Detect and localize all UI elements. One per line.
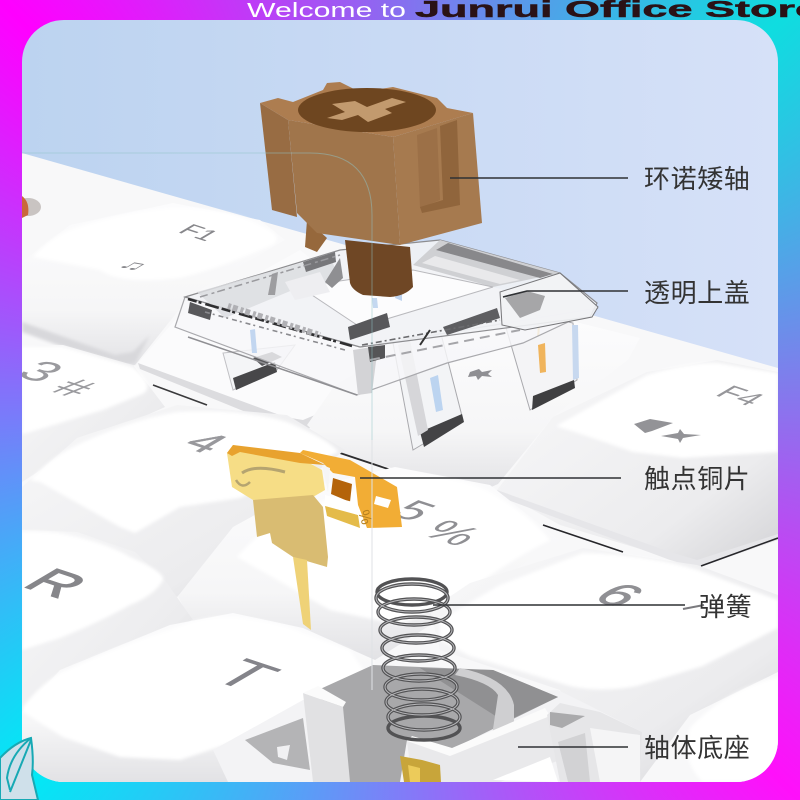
housing sparkle lines <box>188 255 520 360</box>
label: 透明上盖: 透明上盖 <box>644 278 750 308</box>
housing blue reflections <box>395 294 402 301</box>
keyboard <box>7 153 778 782</box>
key: T <box>22 613 375 782</box>
stem recess <box>298 88 436 132</box>
label: 弹簧: 弹簧 <box>699 592 752 622</box>
key: R <box>22 531 192 702</box>
spring <box>376 579 460 740</box>
key: 3# <box>22 345 165 482</box>
base outer body <box>216 700 313 782</box>
key: bottom right <box>736 687 778 782</box>
clear top housing <box>175 240 598 450</box>
label: 轴体底座: 轴体底座 <box>644 733 750 763</box>
key: F2 <box>138 363 314 428</box>
key: F1: ♫ <box>113 256 153 275</box>
key: R: R <box>11 561 102 605</box>
contact tan lower part <box>253 495 328 567</box>
leader lines <box>360 178 685 747</box>
key: F1: F1 <box>172 221 225 245</box>
key: F3 <box>307 369 526 486</box>
contact connecting strip <box>325 506 360 528</box>
base right latch <box>493 703 642 782</box>
housing lower edge <box>175 297 598 395</box>
housing left detail <box>188 302 212 320</box>
key: F1 <box>22 218 262 366</box>
key: 6: 6 <box>582 576 657 614</box>
base left recess <box>245 718 310 770</box>
key: F4 <box>497 386 778 567</box>
base front wall <box>407 715 562 782</box>
mermaid tail icon <box>0 738 38 800</box>
key: T: T <box>197 652 294 698</box>
header banner text: Welcome to <box>247 0 406 22</box>
leg: right <box>506 322 579 411</box>
thin teal guide line <box>22 153 372 440</box>
housing right corner <box>500 273 598 330</box>
label: 环诺矮轴: 环诺矮轴 <box>644 164 750 194</box>
brown stem <box>260 82 482 297</box>
leg: left <box>223 345 295 390</box>
housing top face <box>185 240 597 347</box>
esc key notch <box>22 196 41 218</box>
key: 3#: 3 <box>7 354 76 388</box>
contact pin <box>293 557 311 630</box>
stem front face <box>288 120 400 245</box>
base left post <box>303 693 350 782</box>
contact orange plate <box>300 450 402 528</box>
key: 4 <box>22 405 345 597</box>
switch base <box>213 665 642 782</box>
contact pale upper part <box>227 445 325 500</box>
key: F4: F4 <box>708 382 771 410</box>
housing back bar <box>413 240 560 287</box>
key: 4: 4 <box>173 426 240 459</box>
base cavity <box>318 665 558 782</box>
key: 6 <box>430 548 778 782</box>
base gold terminal <box>400 756 441 782</box>
stem post <box>345 240 413 297</box>
header banner text <box>247 0 800 22</box>
key: 3#: # <box>42 372 105 404</box>
key: 5%: % <box>412 514 493 552</box>
stem cross <box>327 98 406 122</box>
key: 5%: 5 <box>381 494 448 527</box>
housing inner recess <box>300 270 493 327</box>
stem left face <box>260 103 297 217</box>
leg: front <box>393 330 464 450</box>
stem right face <box>393 113 482 245</box>
gold contact plate: % <box>354 508 375 527</box>
stem top rim <box>260 82 473 137</box>
label: 触点铜片: 触点铜片 <box>644 464 750 494</box>
gold contact plate <box>227 445 402 630</box>
key: 5% <box>180 467 510 660</box>
stem small leg <box>305 220 327 252</box>
